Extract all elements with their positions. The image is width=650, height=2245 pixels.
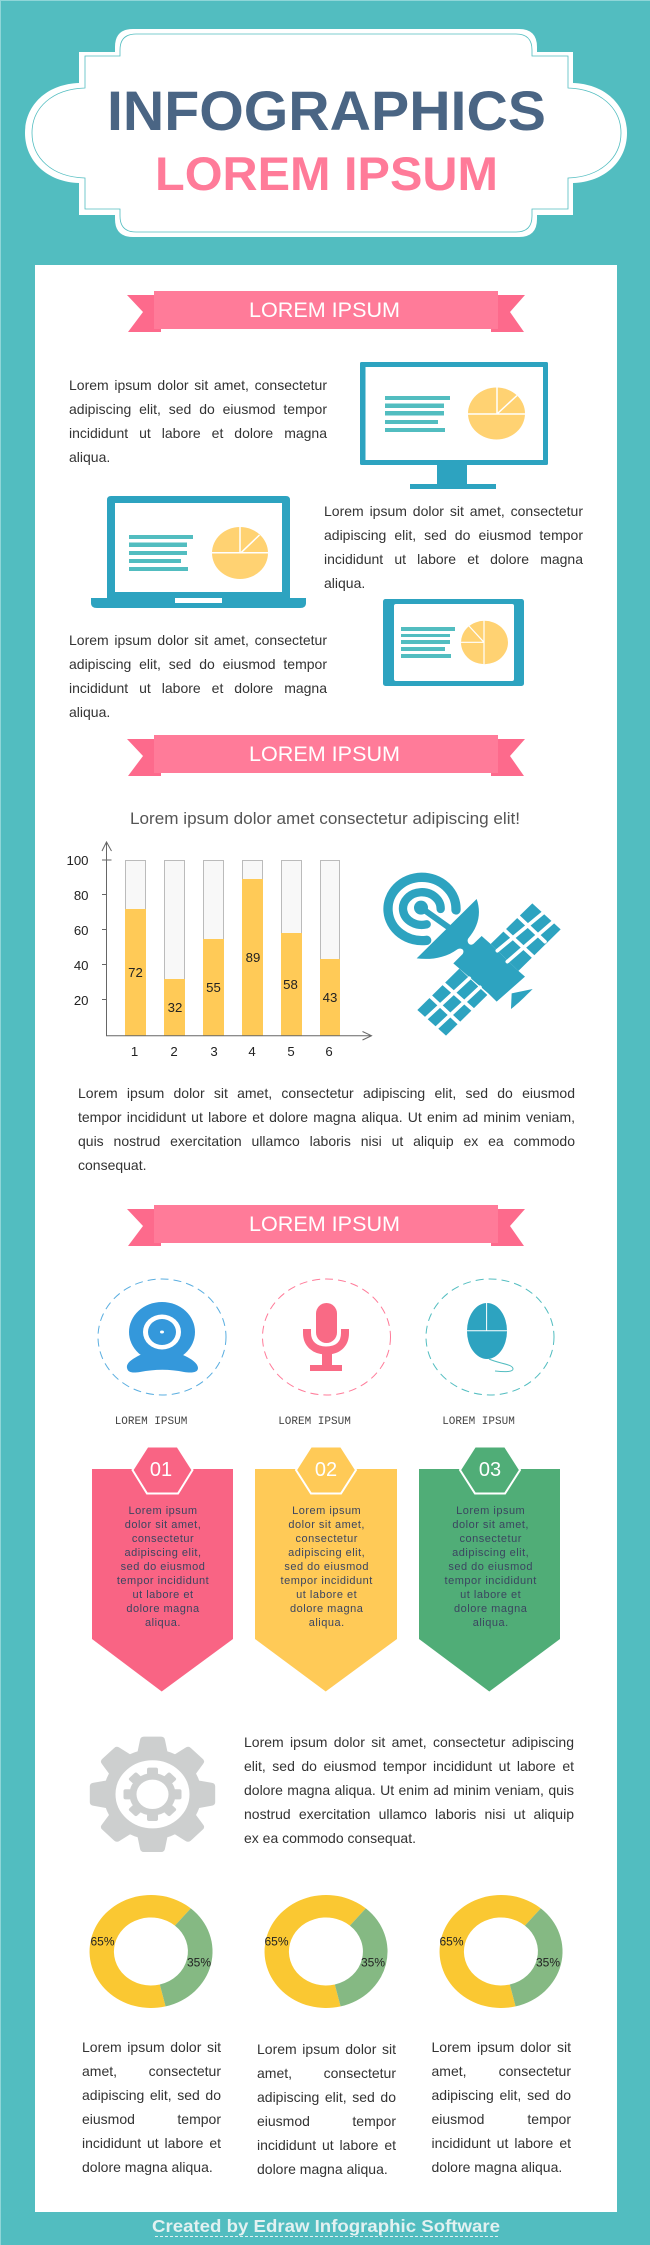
card 03 <box>419 1446 560 1692</box>
title: INFOGRAPHICS <box>107 79 546 142</box>
text block: chart paragraph: tempor incididunt ut labore et dolore magna aliqua. Ut enim ad minim veniam, <box>78 1109 575 1125</box>
text block: card 02: consectetur <box>296 1533 358 1545</box>
text block: intro paragraph 2: adipiscing elit, sed do eiusmod tempor <box>324 527 583 543</box>
icon: monitor <box>360 362 548 489</box>
text block: intro paragraph 2: aliqua. <box>324 575 365 591</box>
text block: intro paragraph 3: incididunt ut labore et dolore magna <box>69 680 327 696</box>
text block: card 02: adipiscing elit, <box>288 1547 365 1559</box>
text block: card 02: ut labore et <box>296 1589 357 1601</box>
text block: donut caption 1: incididunt ut labore et <box>82 2135 221 2151</box>
text block: donut caption 2 <box>257 2041 396 2177</box>
ribbon heading 3: LOREM IPSUM <box>249 1213 400 1236</box>
text block: gear paragraph: Lorem ipsum dolor sit amet, consectetur adipiscing <box>244 1734 574 1750</box>
stacked bar chart: 5 <box>287 1044 295 1059</box>
text block: donut caption 2: adipiscing elit, sed do <box>257 2089 396 2105</box>
text block: card 02: tempor incididunt <box>281 1575 373 1587</box>
text block: card 01: sed do eiusmod <box>121 1561 205 1573</box>
donut chart 2: 35% <box>361 1956 385 1970</box>
text block: donut caption 2: Lorem ipsum dolor sit <box>257 2041 396 2057</box>
subtitle: LOREM IPSUM <box>155 147 498 200</box>
text block: card 01: dolor sit amet, <box>125 1519 201 1531</box>
text block: card 03: ut labore et <box>460 1589 521 1601</box>
text block: card 03: dolor sit amet, <box>452 1519 529 1531</box>
card 01: 01 <box>150 1459 172 1481</box>
text block: donut caption 1: eiusmod tempor <box>82 2111 221 2127</box>
text block: card 02: Lorem ipsum <box>292 1505 361 1517</box>
text block: gear paragraph: nostrud exercitation ullamco laboris nisi ut aliquip <box>244 1806 574 1822</box>
text block: intro paragraph 2: Lorem ipsum dolor sit amet, consectetur <box>324 503 583 519</box>
footer credit: Created by Edraw Infographic Software <box>152 2216 500 2236</box>
stacked bar chart: 58 <box>283 977 298 992</box>
stacked bar chart: 2 <box>170 1044 178 1059</box>
text block: intro paragraph 3 <box>69 632 328 720</box>
icon: gear <box>90 1737 215 1852</box>
text block: chart paragraph: consequat. <box>78 1157 146 1173</box>
text block: card 01: tempor incididunt <box>117 1575 209 1587</box>
card 02 <box>255 1446 397 1692</box>
text block: donut caption 3: adipiscing elit, sed do <box>432 2087 571 2103</box>
icon: webcam <box>98 1279 226 1395</box>
text block: card 03: tempor incididunt <box>445 1575 537 1587</box>
text block: intro paragraph 1 <box>69 377 328 465</box>
donut chart 2 <box>264 1895 388 2008</box>
stacked bar chart: 20 <box>74 993 88 1008</box>
text block: card 01: dolore magna <box>126 1603 200 1615</box>
icon: tablet <box>383 599 524 686</box>
icon captions: LOREM IPSUM <box>442 1416 515 1428</box>
stacked bar chart: 43 <box>323 990 337 1005</box>
text block: card 03: aliqua. <box>473 1617 509 1629</box>
text block: chart paragraph: Lorem ipsum dolor sit amet, consectetur adipiscing elit, sed do eiusmod <box>78 1085 575 1101</box>
ribbon heading 2 <box>127 735 525 776</box>
text block: card 03: Lorem ipsum <box>456 1505 525 1517</box>
text block: card 03: dolore magna <box>454 1603 527 1615</box>
card 03: 03 <box>479 1459 501 1481</box>
text block: intro paragraph 3: aliqua. <box>69 704 110 720</box>
icon: mouse <box>426 1279 554 1395</box>
text block: card 01: adipiscing elit, <box>124 1547 202 1559</box>
text block: donut caption 1: amet, consectetur <box>82 2063 221 2079</box>
icon captions <box>115 1416 515 1428</box>
text block: card 02: dolor sit amet, <box>288 1519 365 1531</box>
text block: donut caption 2: incididunt ut labore et <box>257 2137 396 2153</box>
text block: card 03 <box>444 1505 537 1629</box>
text block: donut caption 2: amet, consectetur <box>257 2065 396 2081</box>
title plaque <box>25 29 627 237</box>
icon: laptop <box>91 496 306 608</box>
text block: card 01: aliqua. <box>145 1617 181 1629</box>
text block: intro paragraph 1: aliqua. <box>69 449 110 465</box>
donut chart 1 <box>90 1895 213 2008</box>
card 02: 02 <box>315 1459 337 1481</box>
stacked bar chart: 100 <box>66 853 88 868</box>
ribbon heading 1 <box>127 291 525 332</box>
ribbon heading 3 <box>127 1205 525 1246</box>
stacked bar chart: 3 <box>210 1044 218 1059</box>
stacked bar chart: 55 <box>206 980 221 995</box>
text block: card 02: dolore magna <box>290 1603 363 1615</box>
ribbon heading 1: LOREM IPSUM <box>249 299 400 322</box>
text block: donut caption 1 <box>82 2039 221 2175</box>
text block: chart paragraph <box>78 1085 575 1173</box>
donut chart 1: 35% <box>187 1956 211 1970</box>
text block: donut caption 3: incididunt ut labore et <box>432 2135 571 2151</box>
stacked bar chart: 72 <box>128 965 143 980</box>
stacked bar chart: 80 <box>74 888 88 903</box>
text block: intro paragraph 1: incididunt ut labore et dolore magna <box>69 425 327 441</box>
icon: microphone <box>262 1279 390 1395</box>
text block: card 03: consectetur <box>460 1533 522 1545</box>
stacked bar chart: 6 <box>325 1044 333 1059</box>
text block: intro paragraph 2: incididunt ut labore et dolore magna <box>324 551 583 567</box>
text block: card 02: aliqua. <box>309 1617 345 1629</box>
text block: card 01 <box>117 1505 209 1629</box>
ribbon heading 2: LOREM IPSUM <box>249 743 400 766</box>
text block: card 02: sed do eiusmod <box>284 1561 369 1573</box>
card 01 <box>92 1446 233 1692</box>
text block: donut caption 3 <box>432 2039 571 2175</box>
icon captions: LOREM IPSUM <box>278 1416 351 1428</box>
text block: donut caption 2: dolore magna aliqua. <box>257 2161 388 2177</box>
text block: card 02 <box>280 1505 373 1629</box>
text block: card 03: sed do eiusmod <box>448 1561 533 1573</box>
text block: chart paragraph: quis nostrud exercitation ullamco laboris nisi ut aliquip ex ea commodo <box>78 1133 575 1149</box>
text block: donut caption 3: eiusmod tempor <box>432 2111 571 2127</box>
text block: card 03: adipiscing elit, <box>452 1547 529 1559</box>
text block: card 01: ut labore et <box>132 1589 194 1601</box>
text block: donut caption 1: dolore magna aliqua. <box>82 2159 213 2175</box>
text block: intro paragraph 3: Lorem ipsum dolor sit amet, consectetur <box>69 632 327 648</box>
white content panel <box>35 265 617 2212</box>
text block: donut caption 3: dolore magna aliqua. <box>432 2159 562 2175</box>
donut chart 2: 65% <box>264 1934 289 1948</box>
text block: intro paragraph 2 <box>324 503 584 591</box>
text block: gear paragraph: elit, sed do eiusmod tempor incididunt ut labore et <box>244 1758 574 1774</box>
text block: donut caption 3: Lorem ipsum dolor sit <box>432 2039 571 2055</box>
text block: gear paragraph: dolore magna aliqua. Ut enim ad minim veniam, quis <box>244 1782 574 1798</box>
text block: donut caption 1: adipiscing elit, sed do <box>82 2087 221 2103</box>
stacked bar chart: 60 <box>74 923 88 938</box>
stacked bar chart: 1 <box>131 1044 138 1059</box>
stacked bar chart: 32 <box>168 1000 182 1015</box>
donut chart 3: 35% <box>536 1956 560 1970</box>
chart heading: Lorem ipsum dolor amet consectetur adipiscing elit! <box>130 809 520 828</box>
stacked bar chart: 40 <box>74 958 88 973</box>
icon: satellite <box>388 877 561 1036</box>
text block: gear paragraph <box>244 1734 574 1846</box>
icon captions: LOREM IPSUM <box>115 1416 187 1428</box>
donut chart 1: 65% <box>90 1934 115 1948</box>
text block: card 01: consectetur <box>132 1533 194 1545</box>
stacked bar chart: 4 <box>248 1044 256 1059</box>
text block: donut caption 1: Lorem ipsum dolor sit <box>82 2039 221 2055</box>
text block: intro paragraph 3: adipiscing elit, sed do eiusmod tempor <box>69 656 327 672</box>
stacked bar chart <box>66 842 372 1059</box>
text block: donut caption 2: eiusmod tempor <box>257 2113 396 2129</box>
text block: intro paragraph 1: Lorem ipsum dolor sit amet, consectetur <box>69 377 327 393</box>
text block: donut caption 3: amet, consectetur <box>432 2063 571 2079</box>
donut chart 3: 65% <box>439 1934 464 1948</box>
text block: intro paragraph 1: adipiscing elit, sed do eiusmod tempor <box>69 401 327 417</box>
text block: card 01: Lorem ipsum <box>128 1505 198 1517</box>
text block: gear paragraph: ex ea commodo consequat. <box>244 1830 416 1846</box>
stacked bar chart: 89 <box>246 950 260 965</box>
donut chart 3 <box>439 1895 563 2008</box>
